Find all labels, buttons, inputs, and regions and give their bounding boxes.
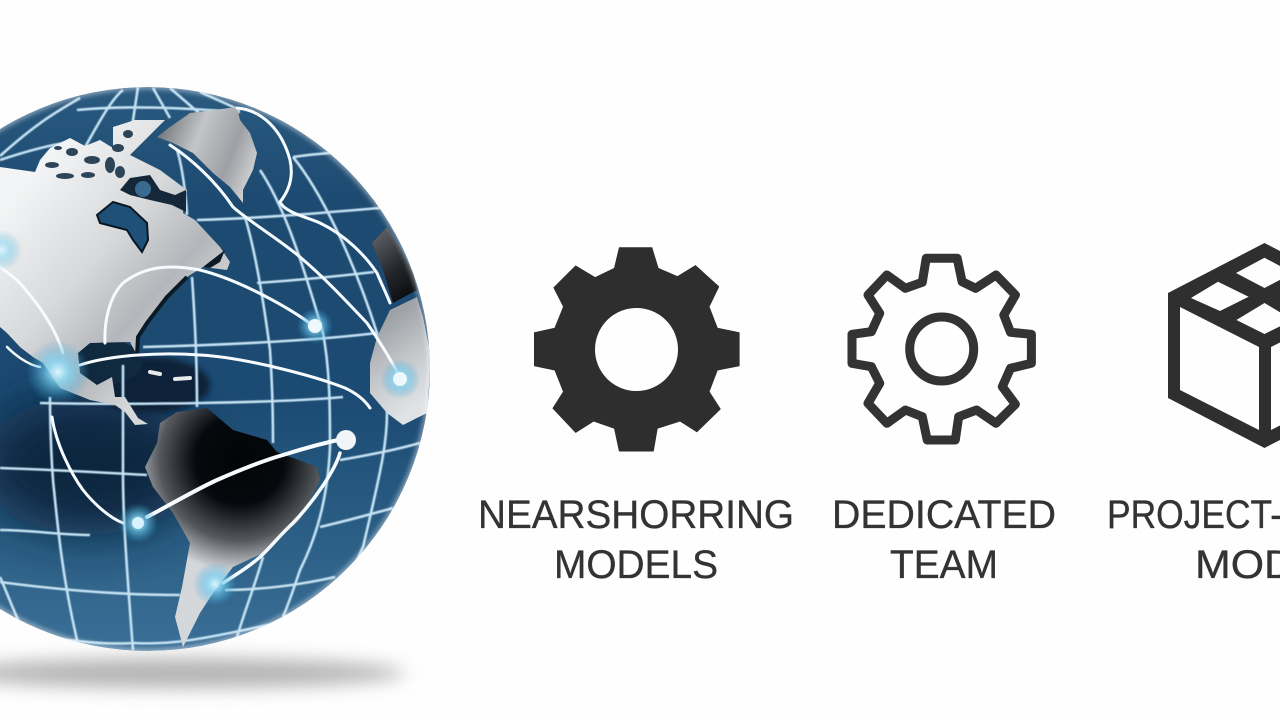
Arctic island details [45,130,133,179]
globe shadow [0,658,405,688]
label: dedicated team: TEAM [890,543,998,587]
continent: Europe [372,227,417,303]
Hudson Bay and dark coast details [97,202,148,252]
globe [0,86,431,652]
connection arcs [0,108,400,583]
label: nearshorring models [478,493,794,587]
rim highlight [0,86,431,652]
icon: box [1168,243,1280,448]
graticule [0,87,420,650]
continent: Greenland [157,107,257,203]
icon: solid gear [534,248,739,451]
glowing nodes [0,230,420,606]
continent: North America [0,120,230,425]
icon: outlined gear [852,258,1031,440]
label: nearshorring models: MODELS [554,543,718,587]
label: project models (cropped at the right edge) [1107,493,1280,587]
label: dedicated team [832,493,1056,587]
label: nearshorring models: NEARSHORRING [478,493,794,537]
continent: Africa [370,297,431,425]
label: dedicated team: DEDICATED [832,493,1056,537]
continent: South America [145,408,320,647]
